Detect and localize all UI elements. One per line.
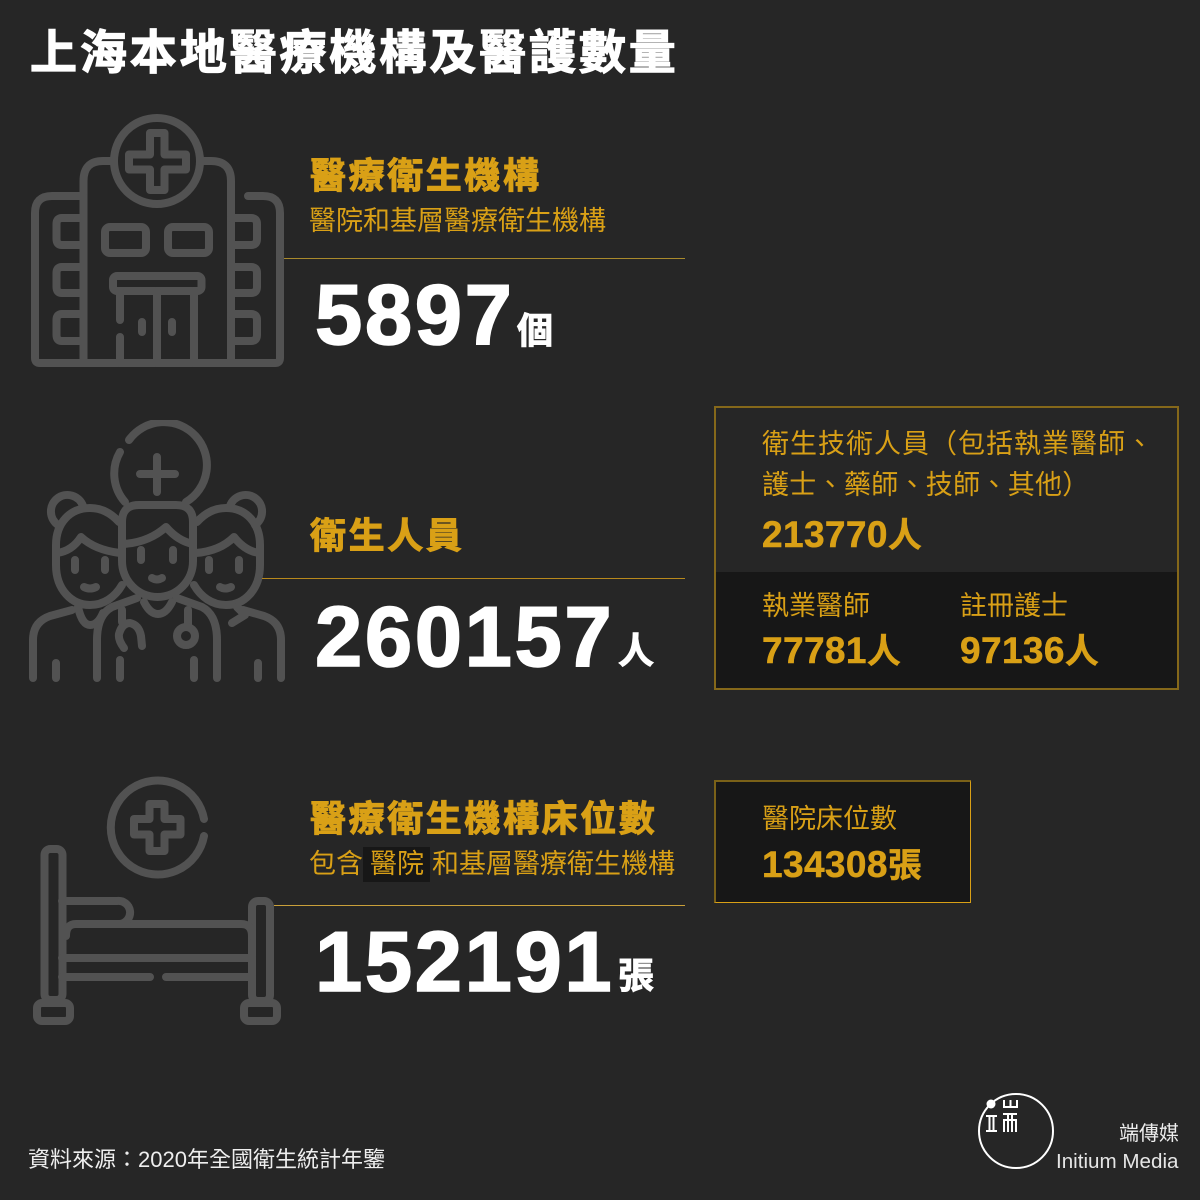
- dark lower section: [716, 572, 1177, 688]
- number: personnel: 260157: [315, 590, 614, 685]
- heading: 醫療衛生機構床位數: [310, 798, 657, 839]
- number: institutions: 5897: [315, 268, 514, 363]
- panel: beds: [33, 776, 685, 1025]
- doctors value: 77781人: [762, 630, 901, 671]
- source note: 資料來源：2020年全國衛生統計年鑒: [28, 1147, 385, 1172]
- highlighted word background: [363, 847, 430, 882]
- description text: prefix: 包含: [309, 849, 363, 879]
- icon: medical staff: [29, 420, 285, 682]
- panel: medical institutions: [31, 114, 685, 367]
- description text: hospital: 醫院: [370, 849, 424, 879]
- nurses value: 97136人: [960, 630, 1099, 671]
- title: 上海本地醫療機構及醫護數量: [30, 26, 679, 79]
- divider: [274, 905, 685, 906]
- description: [309, 847, 675, 882]
- hospital beds label: 醫院床位數: [762, 804, 897, 834]
- panel: health personnel: [29, 420, 685, 685]
- health technicians label line 1: 衛生技術人員（包括執業醫師、: [762, 429, 1154, 459]
- hospital beds value: 134308張: [762, 844, 922, 885]
- unit: 張: [618, 955, 654, 996]
- divider: [262, 578, 685, 579]
- description text: suffix: 和基層醫療衛生機構: [432, 849, 675, 879]
- icon: hospital bed: [33, 776, 281, 1025]
- unit: 人: [618, 630, 654, 671]
- unit: 個: [517, 310, 553, 351]
- divider: [284, 258, 685, 259]
- logo: Initium Media: [978, 1093, 1179, 1173]
- nurses label: 註冊護士: [960, 591, 1068, 621]
- icon: hospital building: [31, 114, 284, 367]
- logo mark: [978, 1093, 1054, 1169]
- panel: hospital beds: [714, 780, 971, 903]
- doctors label: 執業醫師: [762, 591, 870, 621]
- logo Chinese name: 端傳媒: [1119, 1123, 1179, 1145]
- number: beds: 152191: [315, 915, 614, 1010]
- logo English name: Initium Media: [1056, 1150, 1178, 1173]
- description: 醫院和基層醫療衛生機構: [309, 206, 606, 236]
- heading: 醫療衛生機構: [310, 155, 542, 196]
- health technicians label line 2: 護士、藥師、技師、其他）: [762, 470, 1090, 500]
- heading: 衛生人員: [310, 515, 464, 556]
- panel: personnel breakdown: [714, 406, 1179, 690]
- health technicians value: 213770人: [762, 514, 922, 555]
